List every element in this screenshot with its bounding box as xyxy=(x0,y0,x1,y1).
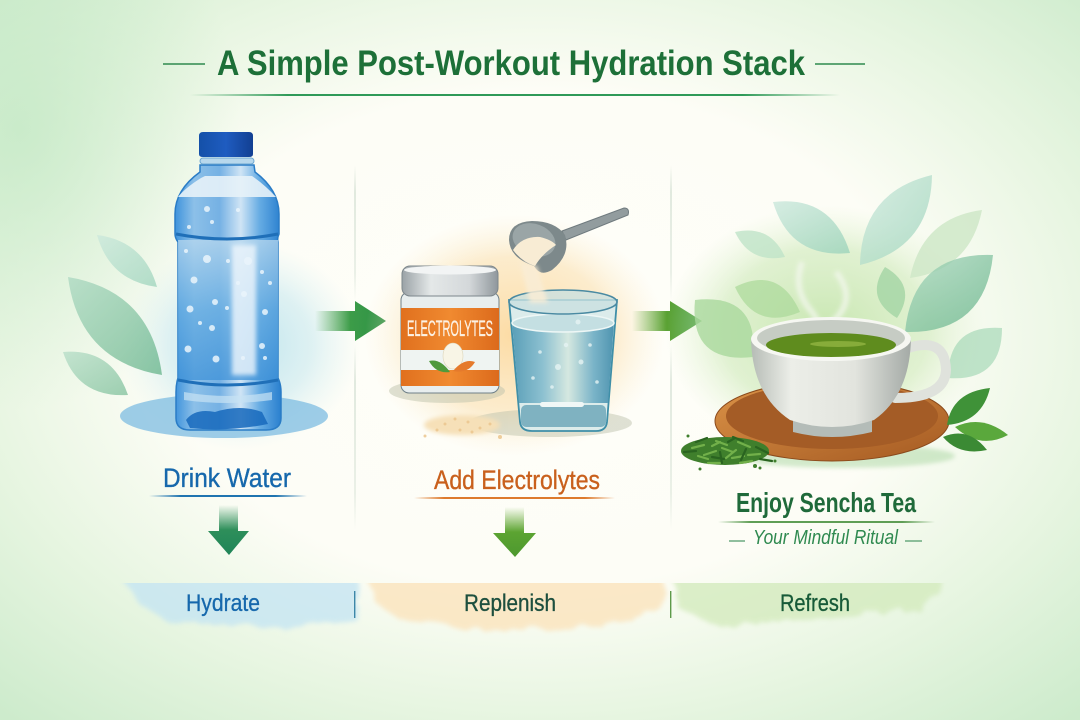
bottle cap xyxy=(199,132,253,157)
highlight strip xyxy=(232,245,256,375)
underline xyxy=(414,497,615,499)
air gap at shoulder xyxy=(178,176,276,197)
arrow: down from drink water xyxy=(208,505,249,555)
bottle body xyxy=(175,165,281,430)
blue watercolor wash xyxy=(120,240,360,450)
powder in scoop xyxy=(513,237,556,266)
title text: A Simple Post-Workout Hydration Stack xyxy=(217,44,805,83)
water shadow ellipse xyxy=(120,394,328,438)
falling powder xyxy=(520,262,548,303)
white label panel xyxy=(401,350,499,371)
lid top xyxy=(404,266,496,274)
hydrate label: Hydrate xyxy=(186,590,260,617)
cup rim xyxy=(751,317,911,361)
plate shadow xyxy=(735,444,955,468)
orange watercolor wash xyxy=(365,215,665,455)
tea highlight xyxy=(810,341,866,347)
step label: drink water: Drink Water xyxy=(163,463,291,493)
green tea xyxy=(766,333,896,357)
tagline dashes xyxy=(729,540,922,542)
step label: enjoy sencha tea: Enjoy Sencha Tea xyxy=(736,487,916,518)
band: refresh wash xyxy=(672,583,944,629)
lower section highlight xyxy=(184,392,272,403)
base pool xyxy=(186,408,268,429)
cup interior xyxy=(757,320,905,356)
leaf emblem xyxy=(429,343,475,372)
water bottle xyxy=(175,132,281,430)
band: hydrate wash xyxy=(123,583,362,631)
jar label text: ELECTROLYTES xyxy=(407,316,493,341)
bubbles xyxy=(531,320,599,389)
underline xyxy=(718,521,935,523)
water surface xyxy=(512,314,614,332)
cup handle xyxy=(895,345,946,398)
band: replenish wash xyxy=(366,583,668,634)
bottom band xyxy=(123,583,944,634)
lower orange band xyxy=(401,370,499,386)
band divider right xyxy=(670,591,671,618)
loose tea leaves xyxy=(681,434,776,470)
water fill xyxy=(512,322,614,403)
title flourish right xyxy=(815,63,865,65)
title flourish left xyxy=(163,63,205,65)
panel: enjoy sencha tea illustration xyxy=(665,175,1008,470)
refresh label: Refresh xyxy=(780,590,850,617)
scoop handle xyxy=(562,208,628,240)
scoop xyxy=(508,208,628,303)
background leaves xyxy=(63,235,162,395)
tea cup xyxy=(751,317,946,437)
label section xyxy=(178,240,278,380)
base highlight xyxy=(540,402,584,407)
panel: drink water illustration xyxy=(63,132,360,450)
cup body xyxy=(751,338,911,427)
replenish label: Replenish xyxy=(464,590,556,617)
green watercolor wash xyxy=(665,205,985,455)
scattered leaf bits xyxy=(686,434,776,470)
bottle ribs xyxy=(176,234,278,385)
arrow: down from add electrolytes xyxy=(493,507,536,557)
panel: add electrolytes illustration xyxy=(365,208,665,455)
neck ring xyxy=(200,158,254,164)
arrow: electrolytes to tea xyxy=(632,301,702,341)
jar body xyxy=(401,292,499,393)
title underline xyxy=(190,94,840,96)
spilled powder xyxy=(424,415,502,439)
background tea leaves xyxy=(694,175,1002,378)
column divider 1 xyxy=(354,165,356,530)
electrolytes jar xyxy=(401,266,499,393)
cup foot xyxy=(793,420,872,437)
step label: add electrolytes: Add Electrolytes xyxy=(434,465,600,495)
tagline: your mindful ritual: Your Mindful Ritual xyxy=(753,527,898,549)
table shadows xyxy=(389,379,632,437)
orange label band xyxy=(401,308,499,350)
arrow: water to electrolytes xyxy=(315,301,386,341)
underline xyxy=(149,495,307,497)
background tint: top-left wash xyxy=(0,0,240,410)
jar lid xyxy=(402,266,498,296)
glass of water xyxy=(509,290,617,431)
scoop interior xyxy=(508,217,560,263)
glass base xyxy=(521,405,606,427)
steam xyxy=(799,262,846,340)
glass body xyxy=(509,300,617,431)
glass rim xyxy=(509,290,617,314)
scoop bowl xyxy=(509,221,566,273)
wooden saucer xyxy=(715,381,949,461)
saucer inner xyxy=(726,383,938,449)
band divider left xyxy=(354,591,355,618)
column divider 2 xyxy=(670,165,672,530)
fresh tea sprig xyxy=(943,388,1008,451)
water droplets xyxy=(184,206,272,362)
band washes xyxy=(123,583,944,634)
